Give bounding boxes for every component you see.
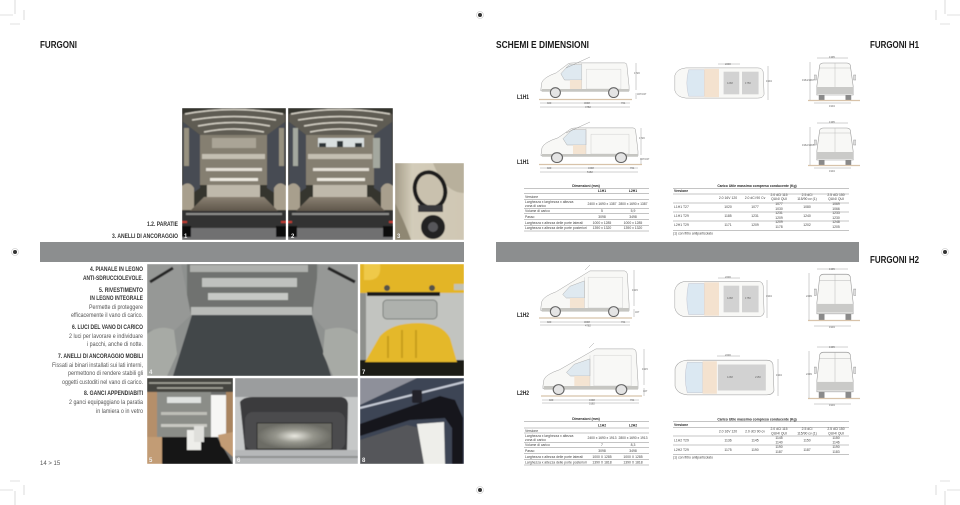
table: payload H2: 1136: [724, 438, 732, 442]
top view L1H1: [675, 62, 772, 100]
table: dimensions H2: 1000 X 1285: [592, 455, 612, 459]
table: payload H2: 1150: [803, 438, 811, 442]
rear view L1H1: [802, 55, 860, 108]
table: payload H1: 1209: [751, 223, 759, 227]
table: dimensions H2: 2800 x 1690 x 1913: [618, 436, 648, 440]
table: payload H2: 2.0 16V 120: [719, 430, 737, 434]
item 6 heading: 6. LUCI DEL VANO DI CARICO: [72, 325, 143, 331]
table: dimensions H2: 3498: [629, 449, 637, 453]
table: dimensions H2: [524, 417, 649, 465]
table: dimensions H1: Larghezza x larghezza x altezza: [525, 200, 574, 204]
table: payload H2: L1H2 T29: [674, 438, 689, 442]
side view L2H1 long: 5182: [587, 170, 593, 174]
table: dimensions H1: Larghezza x altezza delle porte laterali: [525, 221, 583, 225]
side view L1H2: 1915: [632, 288, 638, 292]
side view L2H2: 923: [549, 398, 554, 402]
title: Schemi e dimensioni: SCHEMI E DIMENSIONI: [496, 40, 589, 51]
caption: paratie: 1.2. PARATIE: [147, 222, 178, 228]
side view L2H2: 761: [630, 398, 635, 402]
table: payload H1: L1H1 T27: [674, 205, 689, 209]
rear view L1H2: [806, 267, 860, 329]
table: payload H2: (1) con filtro antiparticolato: [673, 456, 713, 460]
table: payload H2: 2.0 dCi 90 cv: [745, 430, 765, 434]
grey band right: [496, 242, 859, 262]
top view L1H2: 1750: [745, 296, 751, 300]
table: payload H2: QUI4/ QUI: [828, 432, 844, 436]
rear view L2H1: [802, 120, 860, 173]
table: payload H1: 115/90 cv (1): [797, 197, 817, 201]
side view L1H1 short: 761: [621, 101, 626, 105]
text block: equipment descriptions: Fissati ai binari installati sui lati interni,: [52, 363, 143, 369]
table: payload H1: 1209: [775, 216, 783, 220]
photo 8: coat hooks: [360, 378, 464, 464]
table: payload H1: 1202: [803, 223, 811, 227]
top view L1H2: 2230: [725, 275, 731, 279]
table: payload H2: [673, 418, 849, 460]
table: payload H2: 1187: [775, 450, 783, 454]
table: payload H2: 1187: [803, 448, 811, 452]
side view L1H1 short: 4782: [585, 105, 591, 109]
photo numbers row 2 and 3: 5: [149, 458, 153, 464]
side view L2H1 long: 923: [547, 166, 552, 170]
table: payload H2: 1190: [751, 448, 759, 452]
side view L2H2: 5182: [589, 402, 595, 406]
side view L1H1 short: 3098: [584, 101, 590, 105]
side view L1H2: [539, 265, 640, 328]
title: Furgoni H2: FURGONI H2: [870, 255, 919, 266]
top view L1H1: 1268: [727, 81, 733, 85]
photo 2: glazed bulkhead: [288, 108, 393, 240]
rear view L1H2: 1395: [829, 267, 835, 271]
table: dimensions H2: Dimensioni (mm): [572, 417, 600, 421]
table: payload H2: 1175: [724, 448, 732, 452]
table: payload H1: 1231: [751, 214, 759, 218]
side view L2H1 long: 3498: [588, 166, 594, 170]
table: payload H2: Carico Utile massimo compreso conducente (Kg): [717, 418, 797, 422]
text block: equipment descriptions: in lamiera o in vetro: [96, 409, 144, 415]
rear view L1H1: 1904: [829, 104, 835, 108]
page number: 14 > 15: [40, 461, 61, 467]
rear view L2H1: 1962/1965: [802, 143, 815, 147]
table: dimensions H2: Larghezza x altezza delle porte laterali: [525, 455, 583, 459]
side view L1H2: 3098: [584, 320, 590, 324]
top view L1H1: 1750: [745, 81, 751, 85]
table: payload H2: 2.0 dCi 115: [770, 427, 788, 431]
table: payload H2: 1190: [775, 445, 783, 449]
table: payload H1: 1030: [775, 207, 783, 211]
table: payload H2: 1150: [832, 436, 840, 440]
side view L1H2: 761: [621, 320, 626, 324]
rear view L1H2: 1904: [829, 325, 835, 329]
item 7 heading: 7. ANELLI DI ANCORAGGIO MOBILI: [58, 354, 143, 360]
table: dimensions H1: Volume di carico: [525, 209, 550, 213]
table: dimensions H2: Passo: [525, 449, 535, 453]
table: payload H1: 1230: [832, 216, 840, 220]
rear view L2H2: 1395: [829, 345, 835, 349]
side view L1H1 short: 327/347: [637, 92, 647, 96]
table: dimensions H1: 3098: [598, 215, 606, 219]
photo numbers row 2 and 3: 7: [362, 370, 366, 376]
photo 3: anchoring ring: [395, 163, 464, 240]
photo 4: wooden floor: [147, 264, 358, 376]
table: dimensions H1: Larghezza x altezza delle porte posteriori: [525, 226, 587, 230]
photo 1: solid bulkhead: [182, 108, 286, 240]
table: dimensions H1: 5,9: [631, 209, 635, 213]
table: payload H1: 1077: [751, 205, 759, 209]
side view L1H1 short: [539, 57, 647, 109]
side view L2H1 long: 1720: [639, 136, 645, 140]
photo numbers row 2 and 3: 6: [237, 458, 241, 464]
table: dimensions H1: 1390 x 1320: [593, 226, 611, 230]
table: dimensions H2: Larghezza x altezza delle porte posteriori: [525, 460, 587, 464]
table: dimensions H1: Passo: [525, 215, 535, 219]
text block: equipment descriptions: efficacemente il vano di carico.: [71, 313, 143, 319]
photo numbers row 1: [184, 234, 401, 240]
table: payload H2: 2.5 dCi 150: [827, 427, 845, 431]
vehicle label L1H2: L1H2: [517, 313, 530, 319]
table: payload H2: 1190: [832, 445, 840, 449]
table: dimensions H1: zona di carico: [525, 204, 546, 208]
table: dimensions H1: L2H1: [629, 189, 637, 193]
table: payload H1: Versione: [674, 189, 688, 193]
table: dimensions H1: 1000 x 1285: [624, 221, 642, 225]
table: payload H1: 1209: [775, 220, 783, 224]
table: dimensions H1: 1390 x 1320: [624, 226, 642, 230]
title: Furgoni H1: FURGONI H1: [870, 40, 919, 51]
side view L1H2: 327: [635, 310, 640, 314]
rear view L1H2: 2499: [806, 294, 812, 298]
caption: anelli di ancoraggio: 3. ANELLI DI ANCORAGGIO: [112, 234, 178, 240]
table: dimensions H1: 2400 x 1690 x 1387: [588, 202, 617, 206]
table: dimensions H1: Versione: [525, 195, 538, 199]
photo numbers row 1: 2: [291, 234, 295, 240]
top view L1H2: 1268: [727, 296, 733, 300]
table: payload H2: Versione: [674, 423, 688, 427]
table: dimensions H2: 8,3: [631, 443, 635, 447]
rear view L1H1: 1395: [829, 55, 835, 59]
table: payload H1: 1080: [803, 205, 811, 209]
photo numbers row 2 and 3: 8: [362, 458, 366, 464]
side view L1H1 short: 923: [547, 101, 552, 105]
table: payload H1: 1020: [724, 205, 732, 209]
table: dimensions H2: Larghezza x larghezza x altezza: [525, 434, 574, 438]
table: payload H2: 1140: [775, 440, 783, 444]
top view L2H2: [675, 353, 782, 396]
table: payload H1: 1185: [724, 214, 732, 218]
table: payload H1: QUI4/ QUI: [771, 197, 787, 201]
top view L1H1: 1904: [766, 79, 772, 83]
vehicle label L2H2: L2H2: [517, 391, 530, 397]
rear view L2H2: 1904: [829, 403, 835, 407]
side view L2H2: 1915: [642, 367, 648, 371]
photo 5: wood lining: [147, 378, 233, 464]
side view L2H1 long: 761: [630, 166, 635, 170]
text block: equipment descriptions: [52, 267, 144, 415]
side view L2H2: 327: [643, 389, 648, 393]
table: payload H1: (1) con filtro antiparticolato: [673, 232, 713, 236]
table: dimensions H1: [524, 184, 649, 231]
table: dimensions H2: 3098: [598, 449, 606, 453]
vehicle label L1H1 second row: L1H1: [517, 160, 530, 166]
table: payload H1: 1069: [832, 202, 840, 206]
vehicle label L1H1: L1H1: [517, 95, 530, 101]
rear view L2H1: 1395: [829, 120, 835, 124]
side view L2H2: [541, 343, 648, 406]
table: payload H1: 2.5 dCi: [802, 193, 813, 197]
side view L2H1 long: [539, 122, 650, 174]
table: dimensions H2: Volume di carico: [525, 443, 550, 447]
top view L1H2: 1904: [766, 294, 772, 298]
top view L2H2: 1268: [727, 375, 733, 379]
table: dimensions H2: 1000 X 1285: [623, 455, 643, 459]
table: payload H1: Carico Utile massimo compreso conducente (Kg): [717, 184, 797, 188]
text block: equipment descriptions: Permette di proteggere: [89, 305, 144, 311]
photo numbers row 1: 3: [397, 234, 401, 240]
top view L1H1: 2230: [725, 62, 731, 66]
table: payload H1: 1240: [803, 214, 811, 218]
item 4 heading: 4. PIANALE IN LEGNO: [90, 267, 143, 273]
table: payload H1: 2.0 16V 120: [719, 196, 737, 200]
table: dimensions H1: 1000 x 1285: [593, 221, 611, 225]
table: payload H1: 1171: [724, 223, 732, 227]
table: dimensions H1: 5: [601, 209, 603, 213]
table: payload H2: 1145: [775, 436, 783, 440]
table: payload H1: 2.0 dCi 90 Cv: [745, 196, 766, 200]
table: dimensions H2: Versione: [525, 429, 538, 433]
text block: equipment descriptions: IN LEGNO INTEGRALE: [90, 296, 143, 302]
table: payload H1: 1248: [832, 220, 840, 224]
table: dimensions H2: 1390 X 1818: [623, 460, 643, 464]
top view L2H2: 2230: [725, 353, 731, 357]
table: payload H1: 2.5 dCi 150: [827, 193, 845, 197]
text block: equipment descriptions: ANTI-SDRUCCIOLEVOLE.: [83, 276, 143, 282]
side view L1H2: 923: [547, 320, 552, 324]
table: dimensions H2: 2400 x 1690 x 1913: [588, 436, 617, 440]
side view L1H2: 4782: [585, 324, 591, 328]
table: payload H1: 1066: [832, 207, 840, 211]
side view L2H1 long: 327/347: [640, 157, 650, 161]
title: Furgoni: FURGONI: [40, 40, 77, 51]
text block: equipment descriptions: permettono di rendere stabili gli: [68, 371, 143, 377]
table: payload H2: L2H2 T29: [674, 448, 689, 452]
table: payload H1: 1178: [775, 225, 783, 229]
table: payload H1: 2.0 dCi 115: [770, 193, 788, 197]
photo 7: mobile anchoring rings: [360, 264, 464, 376]
rear view L2H2: 2499: [806, 372, 812, 376]
table: payload H1: L2H1 T29: [674, 223, 689, 227]
table: payload H2: 1183: [832, 450, 840, 454]
side view L2H2: 3498: [589, 398, 595, 402]
text block: equipment descriptions: i pacchi, anche di notte.: [87, 342, 143, 348]
table: dimensions H1: 2800 x 1690 x 1387: [618, 202, 648, 206]
top view L2H2: 2150: [755, 375, 761, 379]
top view L1H2: [675, 275, 772, 318]
photo 6: cargo light: [235, 378, 358, 464]
table: payload H2: 1146: [832, 440, 840, 444]
table: dimensions H1: 3498: [629, 215, 637, 219]
rear view L1H1: 1964/1967: [802, 78, 815, 82]
table: payload H1: 1077: [775, 202, 783, 206]
text block: equipment descriptions: 2 luci per lavorare e individuare: [69, 334, 144, 340]
grey band left: [40, 242, 464, 262]
table: payload H2: 115/90 cv (1): [797, 432, 817, 436]
text block: equipment descriptions: oggetti custoditi nel vano di carico.: [62, 380, 143, 386]
table: payload H2: QUI4/ QUI: [771, 432, 787, 436]
table: dimensions H2: L2H2: [629, 424, 637, 428]
text block: equipment descriptions: 2 ganci equipaggiano la paratia: [69, 400, 144, 406]
table: payload H1: [673, 184, 849, 236]
table: payload H1: QUI4/ QUI: [828, 197, 844, 201]
table: payload H1: L1H1 T29: [674, 214, 689, 218]
side view L1H1 short: 1720: [634, 71, 640, 75]
table: payload H1: 1231: [775, 211, 783, 215]
table: dimensions H2: 7: [601, 443, 603, 447]
table: payload H2: 2.5 dCi: [802, 427, 813, 431]
rear view L2H1: 1904: [829, 169, 835, 173]
photo numbers row 2 and 3: 4: [149, 370, 153, 376]
table: dimensions H1: L1H1: [598, 189, 606, 193]
table: dimensions H2: L1H2: [598, 424, 606, 428]
top view L2H2: 1904: [776, 373, 782, 377]
photo numbers row 2 and 3: [149, 370, 366, 464]
table: payload H1: 1233: [832, 211, 840, 215]
table: dimensions H1: Dimensioni (mm): [572, 184, 600, 188]
table: dimensions H2: zona di carico: [525, 438, 546, 442]
item 5 heading: 5. RIVESTIMENTO: [99, 288, 143, 294]
item 8 heading: 8. GANCI APPENDIABITI: [84, 391, 143, 397]
rear view L2H2: [806, 345, 860, 407]
table: dimensions H2: 1390 X 1818: [592, 460, 612, 464]
photo numbers row 1: 1: [184, 234, 188, 240]
table: payload H2: 1145: [751, 438, 759, 442]
table: payload H1: 1205: [832, 225, 840, 229]
